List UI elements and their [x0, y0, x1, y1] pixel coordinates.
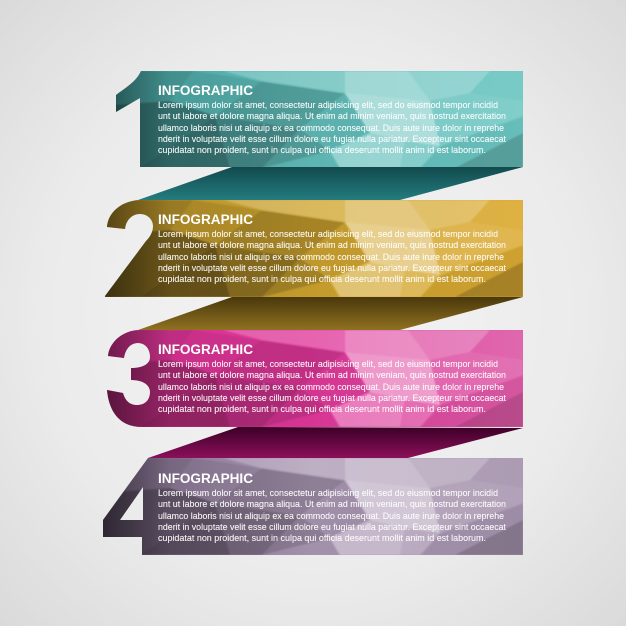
panel 2 body text: nderit in voluptate velit esse cillum dolore eu fugiat nulla pariatur. Excepteur sint occaecat — [158, 263, 506, 273]
panel 4 body text: nderit in voluptate velit esse cillum dolore eu fugiat nulla pariatur. Excepteur sint occaecat — [158, 522, 506, 532]
panel 4 body text — [158, 488, 506, 543]
panel 2 gold with numeral 2 — [100, 200, 523, 297]
panel 2 body text: Lorem ipsum dolor sit amet, consectetur adipisicing elit, sed do eiusmod tempor incidid — [158, 229, 498, 239]
panel 4 purple with numeral 4 — [100, 458, 523, 555]
panel 3 body text: ullamco laboris nisi ut aliquip ex ea commodo consequat. Duis aute irure dolor in reprehe — [158, 382, 504, 392]
panel 1 teal with numeral 1 — [100, 71, 523, 168]
panel 1 body text: unt ut labore et dolore magna aliqua. Ut enim ad minim veniam, quis nostrud exercitation — [158, 111, 506, 121]
panel 3 background — [100, 330, 523, 428]
panel 4 body text: unt ut labore et dolore magna aliqua. Ut enim ad minim veniam, quis nostrud exercitation — [158, 499, 506, 509]
panel 1 heading: INFOGRAPHIC — [158, 83, 253, 98]
panel 3 pink with numeral 3 — [100, 330, 523, 428]
panel 4 body text: ullamco laboris nisi ut aliquip ex ea commodo consequat. Duis aute irure dolor in reprehe — [158, 511, 504, 521]
panel 1 body text: cupidatat non proident, sunt in culpa qui officia deserunt mollit anim id est laborum. — [158, 145, 486, 155]
panel 1 body text: ullamco laboris nisi ut aliquip ex ea commodo consequat. Duis aute irure dolor in reprehe — [158, 123, 504, 133]
panel 3 heading: INFOGRAPHIC — [158, 342, 253, 357]
panel 2 background — [100, 200, 523, 297]
panel 3 body text: Lorem ipsum dolor sit amet, consectetur adipisicing elit, sed do eiusmod tempor incidid — [158, 359, 498, 369]
panel 4 body text: Lorem ipsum dolor sit amet, consectetur adipisicing elit, sed do eiusmod tempor incidid — [158, 488, 498, 498]
panel 1 background — [100, 71, 523, 168]
panel 3 body text: cupidatat non proident, sunt in culpa qui officia deserunt mollit anim id est laborum. — [158, 404, 486, 414]
ribbon fold 1 — [138, 167, 523, 200]
panel 2 heading: INFOGRAPHIC — [158, 212, 253, 227]
panel 4 body text: cupidatat non proident, sunt in culpa qui officia deserunt mollit anim id est laborum. — [158, 533, 486, 543]
ribbon fold 3 — [148, 427, 523, 458]
panel 1 body text: Lorem ipsum dolor sit amet, consectetur adipisicing elit, sed do eiusmod tempor incidid — [158, 100, 498, 110]
panel 4 heading: INFOGRAPHIC — [158, 471, 253, 486]
panel 2 body text: unt ut labore et dolore magna aliqua. Ut enim ad minim veniam, quis nostrud exercitation — [158, 240, 506, 250]
panel 2 body text: ullamco laboris nisi ut aliquip ex ea commodo consequat. Duis aute irure dolor in reprehe — [158, 252, 504, 262]
panel 1 body text: nderit in voluptate velit esse cillum dolore eu fugiat nulla pariatur. Excepteur sint occaecat — [158, 134, 506, 144]
panel 3 body text: nderit in voluptate velit esse cillum dolore eu fugiat nulla pariatur. Excepteur sint occaecat — [158, 393, 506, 403]
ribbon fold 2 — [138, 297, 523, 330]
panel 1 body text — [158, 100, 506, 155]
panel 2 body text — [158, 229, 506, 284]
panel 3 body text: unt ut labore et dolore magna aliqua. Ut enim ad minim veniam, quis nostrud exercitation — [158, 370, 506, 380]
panel 3 body text — [158, 359, 506, 414]
panel 4 background — [100, 458, 523, 555]
panel 2 body text: cupidatat non proident, sunt in culpa qui officia deserunt mollit anim id est laborum. — [158, 274, 486, 284]
